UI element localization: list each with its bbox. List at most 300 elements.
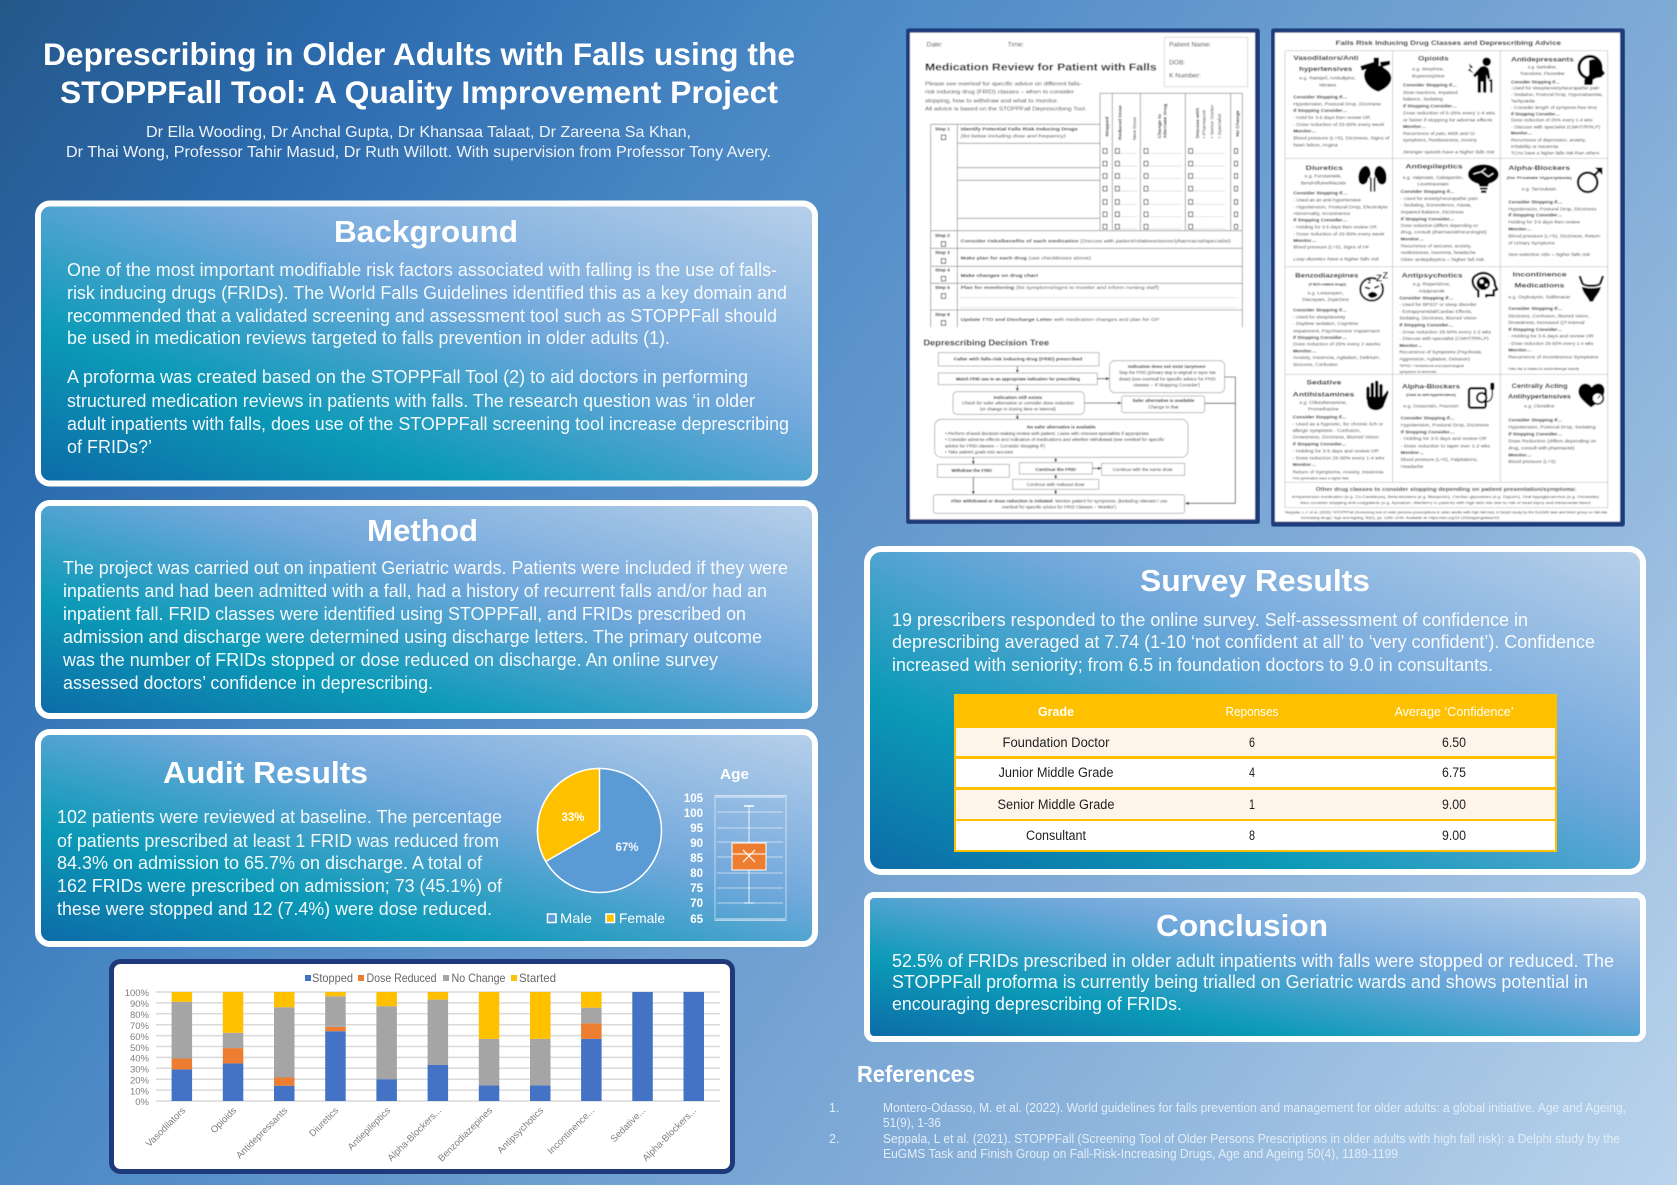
cell: diuretics: - Hypotension, Postural Drop, Electrolyte — [1293, 204, 1388, 210]
cell: opioids — [1403, 56, 1496, 156]
cell: sedative antihistamines: First generation have a higher falls — [1293, 476, 1349, 480]
cell: antiepileptics: Antiepileptics — [1405, 163, 1463, 170]
title: Deprescribing in Older Adults with Falls using the — [43, 36, 795, 72]
text: survey body: 19 prescribers responded to the online survey. Self-assessment of confidence in — [892, 609, 1528, 630]
authors — [66, 124, 771, 161]
decision tree — [923, 339, 1235, 513]
cell: opioids: Stronger opioids have a higher falls risk — [1403, 150, 1495, 156]
cell: antipsychotics — [1399, 273, 1497, 374]
table: confidence by grade: Reponses — [1226, 704, 1279, 719]
cell: benzodiazepines: - Used for sleep/anxiety — [1293, 314, 1346, 320]
cell: antidepressants: Tachycardia — [1511, 99, 1535, 104]
panel: method — [38, 503, 815, 716]
icon: kidneys — [1358, 166, 1387, 192]
references: 51(9), 1-36 — [883, 1116, 941, 1130]
cell: centrally acting: Hypotension, Postural Drop, Sedating — [1508, 425, 1596, 431]
cell: incontinence: Drowsiness, Increased QT-interval — [1508, 320, 1585, 326]
cell: antipsychotics: Monitor… — [1399, 343, 1423, 349]
steps — [935, 126, 1237, 325]
cell: centrally acting: Antihypertensives — [1508, 394, 1571, 401]
text: method body — [62, 557, 788, 693]
text: background body: be used in medication reviews targeted to falls prevention in older adults (1). — [67, 327, 670, 348]
steps: Make changes on drug chart — [961, 273, 1038, 279]
icon: brain bulb — [1468, 164, 1499, 193]
cell: other drug classes: Other drug classes to consider stopping depending on patient presentation/symptoms: — [1316, 487, 1577, 493]
cell: antipsychotics: Aripiprazole — [1419, 288, 1445, 294]
cell: other drug classes: Also consider stopping Anti-coagulants (e.g. Apixaban, Warfarin) in patients with high falls risk due to risk of head injury and intracranial bleed. — [1300, 501, 1592, 505]
text: background body — [67, 259, 789, 457]
cell: sedative antihistamines: allergic symptoms - Confusion, — [1293, 428, 1361, 434]
cell: incontinence: - Holding for 3-5 days and review OR — [1508, 334, 1594, 340]
cell: centrally acting: Blood pressure (L+S) — [1508, 459, 1556, 465]
cell: antiepileptics: Consider Stopping If… — [1401, 189, 1455, 195]
cell: benzodiazepines: Dose reduction of 25% every 2 weeks — [1293, 342, 1381, 348]
cell: benzodiazepines: (# BZD-related drugs) — [1309, 282, 1347, 286]
x axis labels: Vasodilators — [144, 1105, 188, 1150]
cell: antipsychotics: Sedating, Dizziness, Blurred Vision — [1399, 316, 1477, 322]
text: method body: inpatients and had been admitted with a fall, had a history of recurrent falls and/or had an — [63, 580, 767, 601]
cell: opioids: or faster if stopping for adverse effects — [1403, 117, 1493, 123]
cell: incontinence: - Dose reduction 25-50% every 1-4 wks — [1508, 341, 1594, 347]
x axis labels — [144, 1105, 699, 1164]
text: audit body: of patients prescribed at least 1 FRID was reduced from — [57, 830, 499, 851]
cell: antidepressants: e.g. Sertraline, — [1528, 64, 1557, 69]
cell: diuretics — [1293, 165, 1388, 263]
cell: antipsychotics: - Used for BPSD* or sleep disorder — [1399, 302, 1477, 308]
decision tree: • Consider adverse effects and indication of medications and whether withdrawal (see overleaf for specific — [945, 437, 1165, 442]
table: confidence by grade — [954, 694, 1557, 852]
chart grid and axis: 30% — [130, 1064, 150, 1076]
text: audit body — [57, 806, 503, 919]
cell: diuretics: Abnormality, Incontinence — [1293, 211, 1351, 217]
cell: centrally acting: e.g. Clonidine — [1524, 403, 1555, 409]
icon: sleeping face: z — [1368, 276, 1372, 285]
form table: New Dose — [1132, 117, 1138, 140]
cell: opioids: Recurrence of pain, MSK and GI — [1403, 131, 1475, 137]
steps: Plan for monitoring (list symptoms/signs to monitor and inform nursing staff) — [961, 285, 1159, 291]
cell: alpha blockers hypertensive: (Used as anti-hypertensives) — [1406, 393, 1457, 397]
references — [829, 1061, 1626, 1161]
cell: vasodilators: Vasodilators/Anti — [1293, 55, 1359, 62]
text: method body: assessed doctors’ confidence in deprescribing. — [63, 672, 433, 693]
icon: sleeping face: Z — [1376, 274, 1382, 285]
steps: Step 2 — [935, 233, 950, 239]
cell: diuretics: Consider Stopping If… — [1293, 191, 1347, 197]
cell: benzodiazepines: - Daytime sedation, Cognitive — [1293, 321, 1358, 327]
arrows — [972, 367, 1235, 505]
authors: Dr Thai Wong, Professor Tahir Masud, Dr Ruth Willott. With supervision from Professor Tony Avery. — [66, 144, 771, 161]
table: confidence by grade: 6.75 — [1442, 765, 1466, 780]
text: audit body: 162 FRIDs were prescribed on admission; 73 (45.1%) of — [57, 875, 503, 896]
cell: alpha blockers prostate: Consider Stopping If… — [1508, 199, 1562, 205]
cell: diuretics: Diuretics — [1306, 165, 1343, 172]
decision tree: Stop the FRID (primary stop in original or taper low — [1119, 370, 1216, 375]
text: audit body: 102 patients were reviewed at baseline. The percentage — [57, 806, 502, 827]
decision tree: Check for safer alternative or consider dose reduction — [962, 400, 1075, 405]
form header: Patient Name: — [1169, 42, 1211, 49]
form table: Discuss with — [1195, 108, 1201, 138]
cell: sedative antihistamines: Return of Symptoms, Anxiety, Insomnia — [1293, 469, 1384, 475]
steps: Identify Potential Falls Risk Inducing Drugs — [961, 126, 1078, 132]
text: conclusion body — [892, 950, 1614, 1014]
cell: incontinence: Monitor… — [1508, 348, 1532, 354]
cell: alpha blockers prostate: of Urinary Symptoms — [1508, 240, 1555, 246]
cell: centrally acting: If Stopping Consider… — [1508, 432, 1562, 438]
cell: centrally acting: Dose Reduction (differs depending on — [1508, 439, 1597, 445]
cell: antiepileptics: Levetiracetam — [1417, 182, 1449, 188]
cell: sedative antihistamines: Promethazine — [1308, 407, 1339, 413]
table: confidence by grade: 8 — [1249, 828, 1255, 843]
chart grid and axis: 0% — [135, 1097, 150, 1108]
decision tree: Indication does not exist /anymore — [1128, 364, 1206, 369]
cell: incontinence — [1508, 272, 1603, 371]
panel: conclusion — [867, 895, 1643, 1039]
cell: antiepileptics: restlessness, insomnia, headache — [1401, 250, 1476, 256]
table: confidence by grade: 1 — [1249, 797, 1255, 812]
box plot: age: 95 — [690, 823, 704, 835]
cell: alpha blockers prostate: Monitor… — [1508, 226, 1532, 232]
cell: benzodiazepines: If Stopping Consider… — [1293, 335, 1347, 341]
box plot: age: 85 — [690, 853, 704, 865]
decision tree: Withdraw the FRID — [951, 468, 993, 473]
cell: alpha blockers hypertensive: Headache — [1401, 464, 1424, 470]
cell: antiepileptics: drug, consult pharmacist/neurologist) — [1401, 230, 1487, 236]
box plot: age: 105 — [684, 793, 704, 805]
icon: sleeping face: Z — [1382, 271, 1388, 281]
cell: other drug classes — [1292, 487, 1600, 505]
cell: antipsychotics: - Dose reduction 25-50% every 1-2 wks — [1399, 329, 1492, 335]
drug table title: Falls Risk Inducing Drug Classes and Deprescribing Advice — [1336, 40, 1562, 47]
cell: antiepileptics: Monitor… — [1401, 236, 1424, 242]
cell: antidepressants: -Used for sleep/anxiety/neuropathic pain — [1511, 85, 1600, 90]
box plot: age: 70 — [690, 898, 703, 910]
cell: incontinence: e.g. Oxybutynin, Solifenacin — [1508, 294, 1570, 300]
cell: alpha blockers hypertensive: - Holding for 3-5 days and review OR — [1401, 436, 1487, 442]
heading: method: Method — [367, 513, 478, 548]
cell: antiepileptics: e.g. Valproate, Gabapentin, — [1403, 175, 1463, 181]
cell: centrally acting: Centrally Acting — [1512, 383, 1568, 390]
text: background body: A proforma was created based on the STOPPFall Tool (2) to aid doctors in performing — [67, 366, 748, 387]
cell: diuretics: If Stopping Consider… — [1293, 218, 1347, 224]
text: background body: One of the most important modifiable risk factors associated with falling is the use of falls- — [67, 259, 777, 280]
decision tree: Safer alternative is available — [1132, 398, 1195, 403]
form header: All advice is based on the STOPPFall Deprescribing Tool. — [925, 107, 1087, 113]
icon: elderly person with cane — [1468, 57, 1492, 93]
form citation: increasing drugs,” Age and Ageing, 50(4), pp. 1189–1199. Available at: https://doi.org/10.1093/ageing/afaa249. — [1301, 516, 1500, 520]
steps: (list below including dose and frequency) — [961, 133, 1066, 139]
decision tree: Continue with the same dose — [1113, 467, 1173, 472]
cell: benzodiazepines: Consider Stopping If… — [1293, 308, 1347, 314]
cell: opioids: Buprenorphine — [1412, 73, 1445, 79]
legend: bar chart: Stopped — [312, 971, 353, 985]
box plot: age — [684, 766, 786, 926]
cell: antipsychotics: Aggression, Agitation, Delusion) — [1399, 357, 1470, 363]
cell: vasodilators: Hypotension, Postural Drop, Dizziness — [1293, 101, 1382, 107]
table: confidence by grade: Senior Middle Grade — [998, 797, 1114, 812]
cell: sedative antihistamines — [1293, 380, 1389, 480]
form table: Change to — [1157, 114, 1163, 138]
cell: antidepressants: Monitor… — [1511, 131, 1532, 136]
x axis labels: Alpha-Blockers... — [386, 1105, 444, 1164]
legend: sex: Female — [619, 910, 665, 926]
cell: sedative antihistamines: Drowsiness, Dizziness, Blurred Vision. — [1293, 435, 1380, 441]
cell: antidepressants: irritability or insomnia — [1511, 144, 1559, 149]
icon: heart — [1360, 58, 1391, 92]
cell: antiepileptics — [1401, 163, 1499, 263]
cell: opioids: Dose reduction of 5-25% every 1-4 wks — [1403, 110, 1496, 116]
chart grid and axis: 50% — [130, 1043, 150, 1054]
checkbox rows — [1103, 149, 1238, 229]
cell: alpha blockers hypertensive: Alpha-Blockers — [1402, 384, 1460, 391]
cell: antidepressants: Consider Stopping If… — [1511, 79, 1560, 84]
icon: head with mind — [1473, 273, 1497, 297]
cell: alpha blockers prostate: e.g. Tamsulosin — [1522, 186, 1556, 192]
panel: stacked bar chart — [112, 962, 732, 1172]
cell: antipsychotics: *BPSD = behavioural and psychological — [1399, 364, 1464, 368]
title — [43, 36, 795, 110]
box plot: age: 75 — [690, 883, 704, 895]
x axis labels: Sedative... — [609, 1105, 648, 1145]
cell: opioids: balance, Sedating — [1403, 97, 1443, 103]
cell: benzodiazepines: Benzodiazepines — [1295, 273, 1359, 280]
panel: medication review form — [906, 28, 1260, 524]
cell: centrally acting: Monitor… — [1508, 452, 1532, 458]
steps: Step 4 — [935, 268, 950, 274]
legend: bar chart: No Change — [452, 971, 506, 985]
cell: diuretics: Blood pressure (L+S), Signs of HF — [1293, 245, 1369, 251]
cell: opioids: If Stopping Consider… — [1403, 104, 1457, 110]
chart grid and axis: 20% — [130, 1076, 150, 1086]
form header: risk inducing drug (FRID) classes – when to consider — [925, 90, 1074, 96]
cell: benzodiazepines: Monitor… — [1293, 348, 1316, 354]
form header: Medication Review for Patient with Falls — [925, 63, 1157, 74]
heading: survey results: Survey Results — [1140, 563, 1370, 598]
cell: incontinence: Recurrence of Incontinence Symptoms — [1508, 355, 1599, 361]
text: method body: admission and discharge were determined using discharge letters. The primary outcome — [63, 626, 762, 647]
cell: antidepressants: Trazodone, Fluoxetine — [1520, 71, 1565, 76]
legend: bar chart: Dose Reduced — [366, 971, 436, 985]
pie chart: sex: 67% — [615, 842, 639, 854]
x axis labels: Antidepressants — [234, 1105, 290, 1161]
table: confidence by grade: Junior Middle Grade — [998, 765, 1114, 780]
cell: benzodiazepines: e.g. Lorazepam, — [1308, 290, 1344, 296]
box plot: age: 90 — [690, 838, 703, 850]
x axis labels: Incontinence... — [546, 1105, 597, 1157]
heading: background: Background — [334, 214, 518, 249]
heading: conclusion: Conclusion — [1156, 908, 1328, 943]
cell: antipsychotics: - Discuss with specialist (CMHT/RRLP) — [1399, 336, 1489, 342]
cell: incontinence: Dizziness, Confusion, Blurred vision, — [1508, 313, 1589, 319]
cell: antidepressants: Recurrence of depression, anxiety, — [1511, 137, 1586, 142]
cell: opioids: Monitor… — [1403, 124, 1426, 130]
steps: Consider risks/benefits of each medication (Discuss with patient/relatives/senior/pharmacist/specialist) — [961, 238, 1231, 244]
cell: centrally acting — [1508, 383, 1605, 465]
cell: antipsychotics: Antipsychotics — [1402, 273, 1463, 280]
references: References — [857, 1061, 975, 1087]
cell: alpha blockers prostate: Holding for 3-5 days then review — [1508, 220, 1580, 226]
table: confidence by grade: Consultant — [1026, 828, 1086, 843]
text: survey body — [892, 609, 1595, 675]
table: confidence by grade: 6.50 — [1442, 735, 1466, 750]
cell: antipsychotics: symptoms of dementia — [1399, 370, 1437, 374]
table: confidence by grade: 4 — [1249, 765, 1255, 780]
cell: antiepileptics: Dose reduction (differs depending on — [1401, 223, 1479, 229]
pie chart: sex — [537, 768, 665, 926]
form table: Reduced Dose — [1118, 105, 1124, 140]
x axis labels: Benzodiazepines — [436, 1105, 495, 1164]
cell: sedative antihistamines: - Holding for 3-5 days and review OR — [1293, 448, 1379, 454]
icon: heart with gauge — [1578, 384, 1605, 407]
heading: audit results: Audit Results — [163, 755, 368, 790]
form header: Date: — [927, 42, 943, 49]
legend: sex: Male — [560, 910, 592, 926]
cell: alpha blockers hypertensive: Hypotension, Postural Drop, Dizziness — [1401, 423, 1490, 429]
cell: sedative antihistamines: e.g. Chlorphenamine, — [1299, 400, 1347, 406]
cell: sedative antihistamines: - Used as a hypnotic, for chronic itch or — [1293, 421, 1384, 427]
icon: male symbol — [1578, 168, 1602, 192]
cell: centrally acting: Consider Stopping If… — [1508, 418, 1562, 424]
text: background body: recommended that a validated screening and assessment tool such as STOPPFall should — [67, 305, 777, 326]
references: Seppala, L et al. (2021). STOPPFall (Screening Tool of Older Persons Prescriptions in older adults with high fall risk): a Delphi study by the — [883, 1132, 1620, 1146]
cell: antiepileptics: Impaired Balance, Dizziness. — [1401, 209, 1465, 215]
form table: Stopped — [1104, 117, 1110, 137]
box plot: age: Age — [720, 766, 749, 783]
cell: antidepressants: - Discuss with specialist (CMHT/RRLP) — [1511, 124, 1601, 129]
cell: diuretics: - Holding for 3-5 days then review OR — [1293, 224, 1377, 230]
text: background body: of FRIDs?’ — [67, 436, 152, 457]
form header: K Number: — [1169, 73, 1201, 80]
form table: • Specialist — [1217, 113, 1223, 138]
panel: audit results — [38, 732, 815, 944]
cell: benzodiazepines: Anxiety, Insomnia, Agitation, Delirium, — [1293, 355, 1380, 361]
cell: antidepressants: Dose reduction of 25% every 1-4 wks — [1511, 118, 1593, 123]
cell: centrally acting: drug, consult with pharmacist) — [1508, 446, 1575, 452]
icon: head with bulb — [1579, 56, 1605, 85]
text: conclusion body: encouraging deprescribing of FRIDs. — [892, 993, 1182, 1014]
box plot: age: 100 — [684, 808, 703, 820]
table: confidence by grade: Foundation Doctor — [1002, 735, 1110, 750]
cell: antiepileptics: - Sedating, Somnolence, Ataxia, — [1401, 203, 1472, 209]
cell: alpha blockers hypertensive: - Dose reduction to taper over 1-2 wks — [1401, 443, 1491, 449]
form table: Alternate Drug — [1163, 104, 1169, 138]
chart grid and axis: 90% — [130, 999, 150, 1010]
cell: incontinence: If Stopping Consider… — [1508, 327, 1562, 333]
form table: • Senior Doctor — [1209, 104, 1215, 138]
cell: sedative antihistamines: - Dose reduction 25-50% every 1-4 wks — [1293, 455, 1385, 461]
x axis labels: Opioids — [209, 1105, 239, 1136]
steps: Step 6 — [935, 312, 950, 318]
panel: background — [38, 204, 815, 484]
cell: vasodilators: heart failure, Angina — [1293, 142, 1338, 148]
cell: diuretics: - Used as an anti-hypertensive — [1293, 198, 1361, 204]
cell: antipsychotics: - Extrapyramidal/Cardiac Effects, — [1399, 309, 1472, 315]
references: Montero-Odasso, M. et al. (2022). World guidelines for falls prevention and management for older adults: a global initiative. Age and Ageing, — [883, 1101, 1626, 1115]
panel: drug classes table — [1271, 28, 1625, 527]
steps: Step 5 — [935, 285, 950, 291]
icon: blood pressure cuff — [1469, 383, 1494, 408]
steps: Step 3 — [935, 250, 950, 256]
panel: survey results — [867, 549, 1643, 872]
table: confidence by grade: 9.00 — [1442, 797, 1466, 812]
cell: diuretics: - Dose reduction of 25-50% every week — [1293, 231, 1385, 237]
decision tree: Change to that — [1148, 404, 1179, 409]
cell: alpha blockers hypertensive: If Stopping Consider… — [1401, 429, 1455, 435]
cell: antidepressants: Antidepressants — [1511, 56, 1574, 63]
chart grid and axis: 100% — [125, 988, 150, 999]
references: 2. — [829, 1132, 839, 1146]
decision tree: Match FRID use to an appropriate indication for prescribing — [956, 377, 1080, 382]
cell: vasodilators — [1293, 55, 1391, 148]
legend: sex — [548, 910, 665, 926]
steps: Step 1 — [935, 126, 950, 132]
cell: vasodilators: Monitor… — [1293, 128, 1317, 134]
cell: antipsychotics: Recurrence of Symptoms (Psychosis, — [1399, 350, 1482, 356]
cell: antipsychotics: Consider Stopping If… — [1399, 295, 1453, 301]
table: confidence by grade: Grade — [1038, 704, 1074, 719]
text: background body: risk inducing drugs (FRIDs). The World Falls Guidelines identified this as a key domain and — [67, 282, 787, 303]
cell: opioids: Slow reactions, Impaired — [1403, 90, 1458, 96]
cell: alpha blockers prostate — [1507, 165, 1602, 258]
bars — [172, 992, 704, 1101]
chart grid and axis: 40% — [130, 1054, 150, 1064]
authors: Dr Ella Wooding, Dr Anchal Gupta, Dr Khansaa Talaat, Dr Zareena Sa Khan, — [146, 124, 691, 141]
cell: incontinence: Consider Stopping If… — [1508, 306, 1562, 312]
form header — [925, 37, 1248, 113]
cell: antidepressants — [1511, 56, 1605, 155]
decision tree: dose) (see overleaf for specific advice for FRID — [1119, 376, 1216, 381]
cell: antidepressants: - Sedation, Postural Drop, Hyponatraemia, — [1511, 92, 1603, 97]
cell: alpha blockers prostate: (for Prostate Hyperplasia) — [1507, 176, 1573, 180]
decision tree: overleaf for specific advice for FRID Classes – 'Monitor') — [1002, 505, 1117, 510]
form header: Please see overleaf for specific advice on different falls- — [925, 82, 1082, 88]
cell: antiepileptics: If Stopping Consider… — [1401, 216, 1455, 222]
drug table grid — [1285, 51, 1608, 508]
table: confidence by grade: 9.00 — [1442, 828, 1466, 843]
cell: vasodilators: Nitrates — [1319, 83, 1337, 89]
cell: diuretics: Bendroflumethiazide — [1301, 180, 1346, 186]
cell: vasodilators: hypertensives — [1299, 66, 1353, 73]
icon: sleeping face — [1360, 271, 1390, 301]
x axis labels: Diuretics — [307, 1105, 341, 1139]
text: method body: inpatient fall. FRID classes were identified using STOPPFall, and FRIDs prescribed on — [63, 603, 746, 624]
cell: sedative antihistamines: Monitor… — [1293, 462, 1316, 468]
cell: alpha blockers hypertensive — [1401, 383, 1494, 470]
cell: sedative antihistamines: Sedative — [1306, 380, 1342, 387]
decision tree: Continue the FRID — [1035, 467, 1077, 472]
cell: vasodilators: - Hold for 3-5 days then review OR — [1293, 115, 1370, 121]
form citation: Seppala, L.J. et al. (2020) “STOPPFall (Screening tool of older persons prescriptions in older adults with high fall risk): A Delphi study by the EuGMS task and finish group on fall-risk- — [1285, 511, 1609, 515]
cell: vasodilators: If Stopping Consider… — [1293, 108, 1347, 114]
form table: No Change — [1235, 110, 1241, 137]
chart grid and axis: 10% — [130, 1086, 150, 1098]
cell: diuretics: Monitor… — [1293, 238, 1317, 244]
cell: sedative antihistamines: Antihistamines — [1293, 392, 1355, 399]
cell: antiepileptics: Recurrence of seizures, anxiety, — [1401, 243, 1471, 249]
cell: alpha blockers prostate: If Stopping Consider… — [1508, 213, 1562, 219]
cell: alpha blockers prostate: Non-selective ABs = higher falls risk — [1508, 252, 1591, 258]
decision tree: advice for FRID classes – 'Consider Stopping If') — [945, 444, 1045, 449]
x axis labels: Alpha-Blockers... — [641, 1105, 699, 1164]
decision tree: Continue with reduced dose — [1027, 482, 1085, 487]
cell: alpha blockers hypertensive: Monitor… — [1401, 450, 1424, 456]
decision tree: • Take patient goals into account — [945, 449, 1014, 454]
icon: hand — [1366, 381, 1389, 410]
decision tree: classes – 'If Stopping Consider') — [1133, 383, 1200, 388]
form table — [931, 93, 1242, 327]
cell: alpha blockers hypertensive: e.g. Doxazosin, Prazosin — [1403, 403, 1459, 409]
cell: other drug classes: Antiparkinson medication (e.g. Co-Careldopa), Beta-blockers (e.g. Bisoprolol), Cardiac glycosides (e.g. Digoxin), Oral hypoglycaemics (e.g. Gliclazide). — [1292, 495, 1600, 499]
text: conclusion body: STOPPFall proforma is currently being trialled on Geriatric wards and shows potential in — [892, 971, 1588, 992]
